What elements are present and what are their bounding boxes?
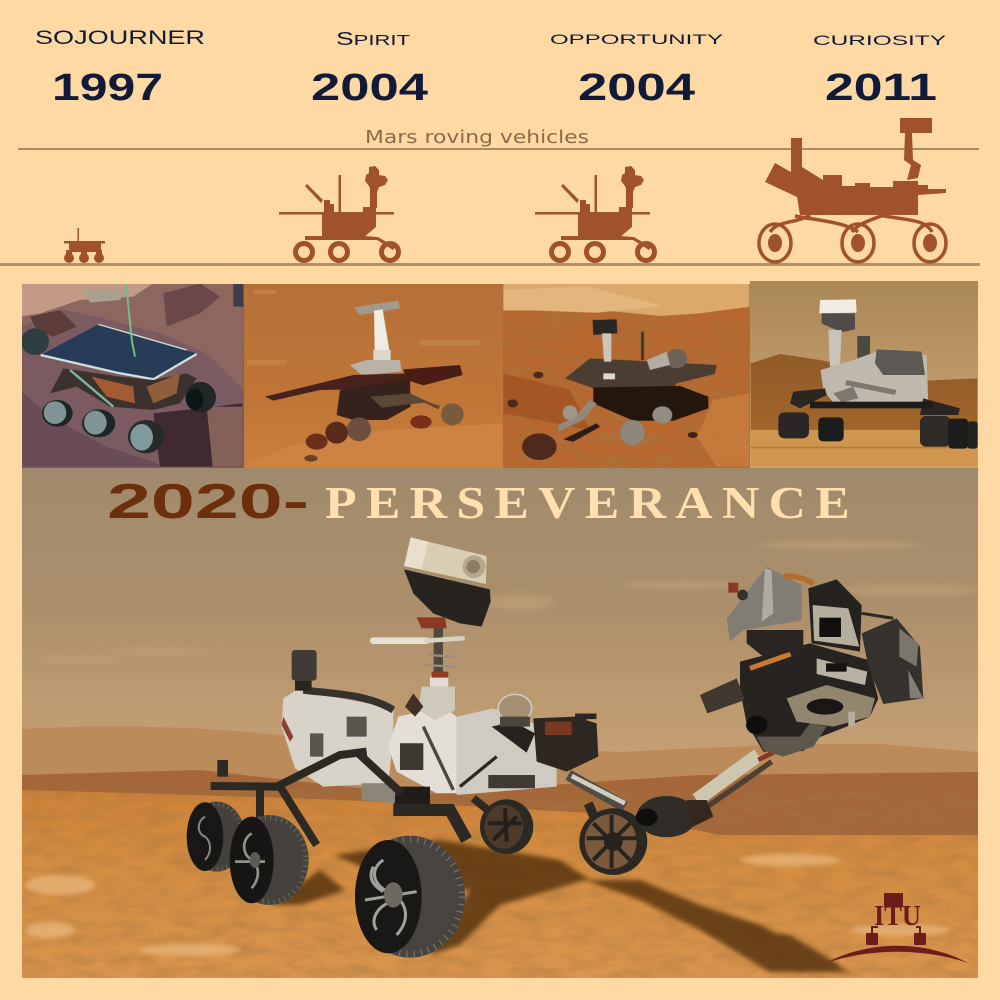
silhouette: Spirit (279, 166, 398, 260)
ground texture (22, 790, 978, 978)
chart heading: Mars roving vehicles: Mars roving vehicles (365, 128, 589, 148)
photo: Curiosity rover (750, 281, 978, 468)
suspension (211, 752, 597, 845)
sky (22, 468, 978, 768)
title: 2020 - Perseverance: 2020- (107, 475, 309, 529)
robot arm and turret (636, 567, 923, 837)
forearm (697, 755, 758, 800)
top rule line (18, 148, 979, 150)
logo: ITU rover emblem: ITU (874, 900, 921, 932)
label: Curiosity 2011: 2011 (825, 67, 937, 109)
ground rule line (0, 263, 980, 266)
label: Spirit 2004 (311, 29, 428, 109)
silhouette: Curiosity (759, 118, 946, 262)
label: Opportunity 2004: OPPORTUNITY (550, 31, 724, 47)
silhouette: Opportunity (535, 166, 654, 260)
wheel: middle left (230, 815, 309, 905)
rover shadow (270, 840, 850, 973)
cables (783, 576, 813, 584)
label: Spirit 2004: 2004 (311, 67, 428, 109)
right instruments (862, 618, 923, 704)
label: Curiosity 2011 (813, 32, 947, 109)
turret lower (740, 643, 878, 752)
label: Curiosity 2011: CURIOSITY (813, 32, 947, 48)
main rover traced body (187, 537, 647, 958)
ground (22, 790, 978, 978)
cylinder camera body (808, 579, 862, 652)
photo: Spirit rover (243, 284, 503, 468)
logo: ITU rover emblem (826, 893, 968, 963)
wispy clouds (490, 540, 974, 609)
rover names and years header (35, 27, 947, 109)
central hull (388, 707, 457, 793)
title: 2020 - Perseverance (107, 475, 859, 529)
wheel: centre right (480, 799, 533, 854)
label: Spirit 2004: S PIRIT (336, 29, 410, 49)
distant hills (22, 726, 978, 800)
label: Opportunity 2004 (550, 31, 724, 109)
photo: Opportunity rover (503, 283, 750, 468)
mast head (404, 569, 491, 627)
wheel: rear left (187, 802, 245, 872)
gray box (727, 567, 802, 642)
mast (434, 628, 443, 672)
photo: Perseverance main scene (22, 468, 980, 978)
label: Sojourner 1997: SOJOURNER (35, 27, 205, 49)
wheel: front right (579, 808, 647, 875)
silhouette: Sojourner (64, 228, 105, 263)
right deck (457, 708, 557, 795)
photo: Sojourner rover (20, 283, 244, 468)
wheel: front (355, 836, 465, 958)
rear deck (282, 690, 393, 787)
title: 2020 - Perseverance: PERSEVERANCE (325, 478, 859, 528)
solar panel (41, 324, 197, 379)
label: Opportunity 2004: 2004 (578, 67, 695, 109)
dark mid band (22, 770, 978, 840)
label: Sojourner 1997 (35, 27, 205, 109)
label: Sojourner 1997: 1997 (52, 67, 163, 109)
elbow (637, 796, 697, 837)
